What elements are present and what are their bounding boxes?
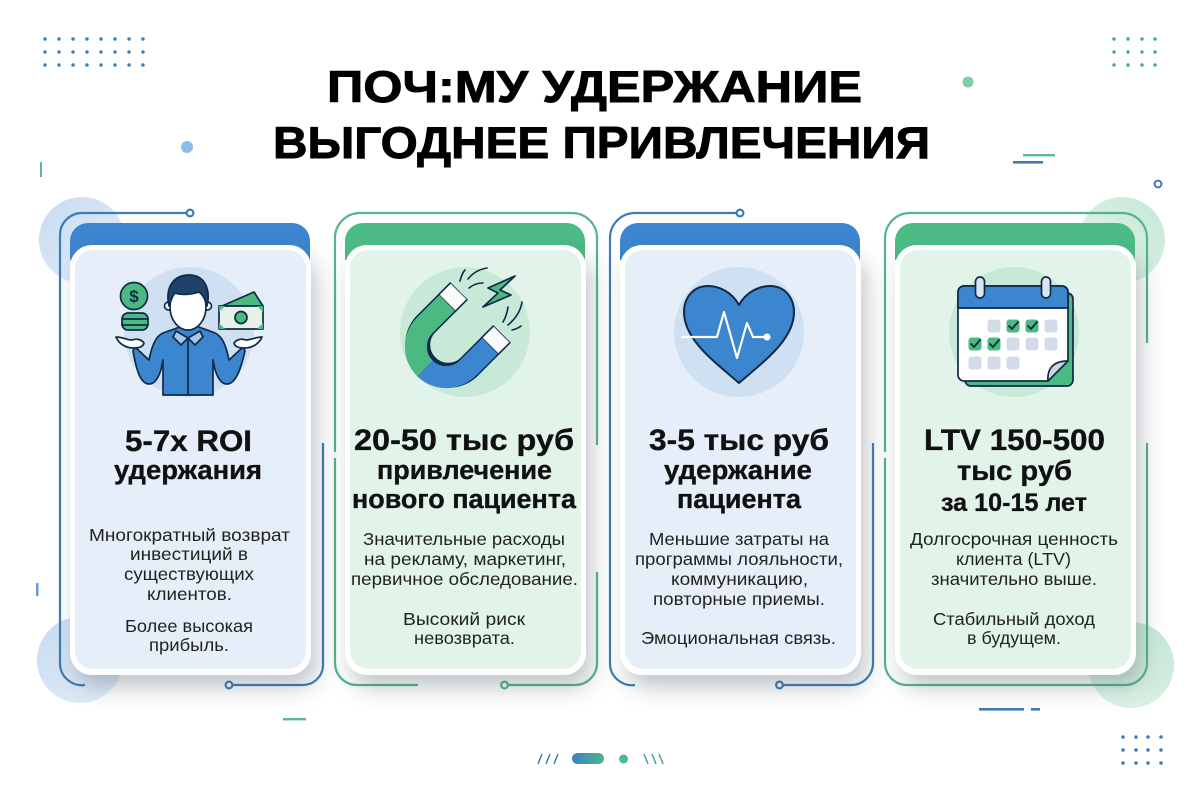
icon: heart with pulse	[674, 267, 804, 397]
card 2 text: Высокий риск	[403, 609, 525, 629]
dot grid: top left	[43, 37, 145, 67]
card 3 heading: 3-5 тыс руб	[649, 424, 829, 457]
card 4 text: Долгосрочная ценность	[910, 529, 1118, 549]
magnet green arm	[416, 291, 459, 368]
card 1 text	[89, 525, 290, 655]
card 4 text: Стабильный доход	[933, 609, 1095, 629]
card 1 text: существующих	[124, 564, 254, 584]
card 2 body	[345, 245, 586, 675]
coin stack	[122, 313, 148, 330]
card 3 header	[620, 223, 860, 260]
card 3: retention cost	[620, 223, 861, 675]
card 2 heading: нового пациента	[352, 484, 577, 514]
card 1 text: Многократный возврат	[89, 525, 290, 545]
pulse line	[682, 312, 767, 358]
icon: magnet	[400, 267, 530, 397]
card 3 text: программы лояльности,	[635, 549, 843, 569]
magnet blue arm	[425, 334, 502, 377]
banknotes	[222, 292, 263, 306]
dot grid: bottom right	[1121, 735, 1163, 765]
title: ПОЧ:МУ УДЕРЖАНИЕ	[327, 63, 862, 112]
checked day cells	[968, 320, 1038, 350]
card 3 heading: удержание	[664, 455, 812, 485]
card 4 text: клиента (LTV)	[956, 549, 1071, 569]
card 3 text: Меньшие затраты на	[649, 529, 829, 549]
person head	[164, 302, 172, 310]
lightning bolt	[483, 276, 515, 307]
calendar rings	[976, 277, 984, 298]
footer ornament	[538, 753, 663, 764]
coin	[120, 282, 148, 310]
card 4 heading	[924, 424, 1105, 517]
card 3 text: повторные приемы.	[653, 589, 825, 609]
card 1 body	[70, 245, 311, 675]
magnetic field lines	[460, 268, 522, 330]
heart	[684, 286, 794, 383]
card 4 text: в будущем.	[967, 628, 1061, 648]
card 2 header	[345, 223, 585, 260]
card 2 text: на рекламу, маркетинг,	[364, 549, 566, 569]
card 4 text	[910, 529, 1118, 648]
card 1 text: Более высокая	[125, 616, 253, 636]
title	[273, 63, 930, 168]
card 2: acquisition cost	[345, 223, 586, 675]
person collar	[173, 331, 203, 345]
card 3 text	[635, 529, 843, 648]
card 2 text	[351, 529, 578, 648]
card 4 header	[895, 223, 1135, 260]
calendar top bar	[958, 286, 1068, 308]
card 1 heading	[114, 425, 262, 485]
card 1 header	[70, 223, 310, 260]
calendar back sheet	[965, 293, 1073, 386]
card 2 heading: 20-50 тыс руб	[354, 424, 574, 457]
grey day cells	[968, 320, 1058, 370]
card 4 heading: тыс руб	[957, 455, 1072, 486]
hands	[116, 337, 144, 348]
icon: person with money: $	[129, 287, 139, 306]
card 4 heading: за 10-15 лет	[941, 489, 1087, 517]
connector lines: card 2	[335, 213, 597, 688]
card 2 heading	[352, 424, 577, 514]
person shirt	[133, 326, 245, 395]
card 1 heading: 5-7x ROI	[125, 425, 252, 458]
card 2 heading: привлечение	[377, 455, 552, 485]
magnet tips	[447, 291, 502, 346]
card 2 text: Значительные расходы	[363, 529, 565, 549]
icon: calendar	[949, 267, 1079, 397]
card 3 body	[620, 245, 861, 675]
card 2 text: невозврата.	[414, 628, 515, 648]
card 1 text: прибыль.	[149, 635, 229, 655]
card 4 text: значительно выше.	[931, 569, 1097, 589]
card 2 text: первичное обследование.	[351, 569, 578, 589]
page curl	[1048, 361, 1068, 381]
icon: person with money	[116, 267, 263, 397]
dot grid: top right	[1112, 37, 1157, 67]
title: ВЫГОДНЕЕ ПРИВЛЕЧЕНИЯ	[273, 119, 930, 168]
card 3 heading: пациента	[677, 484, 802, 514]
connector lines: card 1	[60, 210, 323, 688]
card 4 body	[895, 245, 1136, 675]
small accent marks	[36, 76, 1161, 720]
card 1 text: клиентов.	[147, 584, 232, 604]
card 3 text: Эмоциональная связь.	[641, 628, 836, 648]
card 3 text: коммуникацию,	[671, 569, 808, 589]
calendar page	[958, 286, 1068, 381]
card 1 text: инвестиций в	[130, 544, 248, 564]
card 4 heading: LTV 150-500	[924, 424, 1105, 457]
card 1 heading: удержания	[114, 455, 262, 485]
connector lines: card 3	[610, 210, 873, 688]
decorative background circles	[37, 197, 1174, 708]
card 1: ROI	[70, 223, 311, 675]
magnet outline	[418, 291, 502, 375]
connector lines: card 4	[885, 213, 1147, 685]
card 3 heading	[649, 424, 829, 514]
card 4: lifetime value	[895, 223, 1136, 675]
